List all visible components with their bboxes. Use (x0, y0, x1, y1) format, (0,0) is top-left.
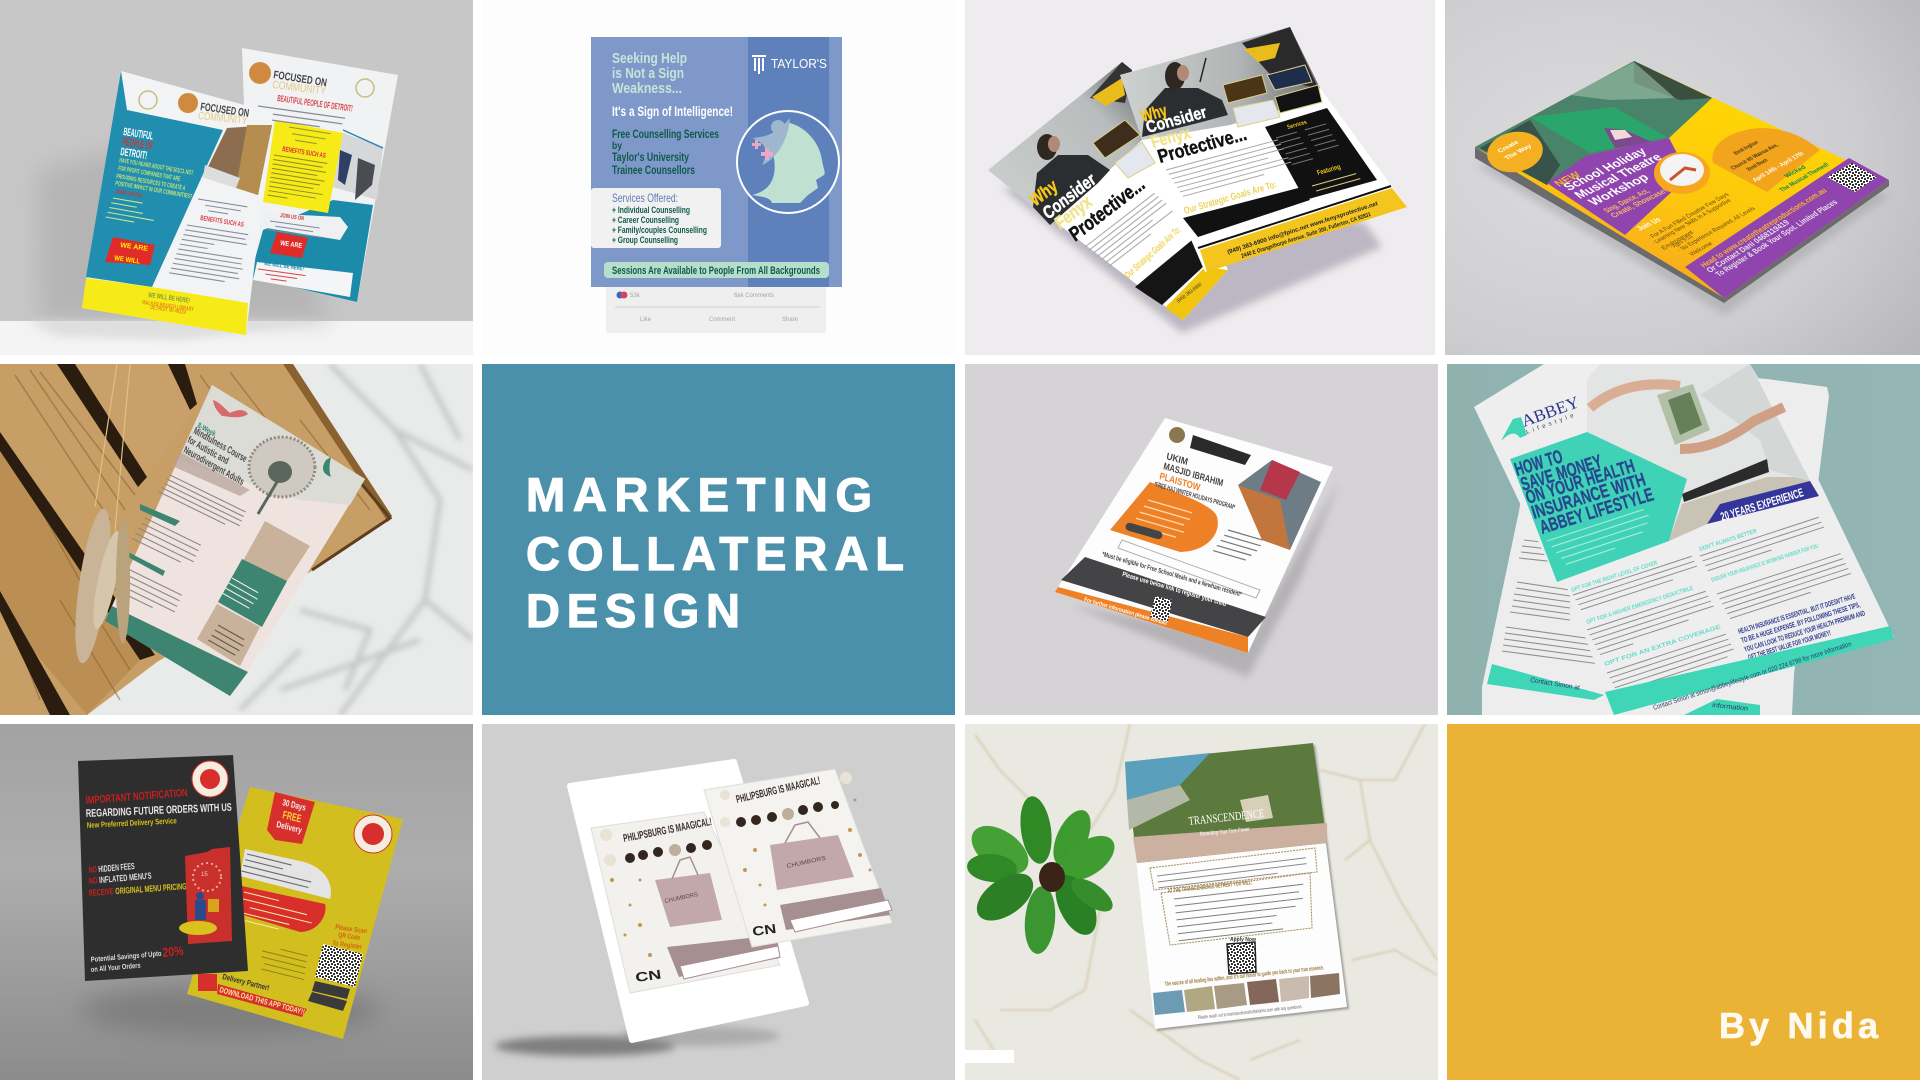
panel: Focused on Community flyers (0, 0, 473, 355)
QR code (315, 944, 363, 987)
flyer (105, 385, 365, 696)
flyer: black flyer: New Preferred Delivery Service (87, 816, 177, 830)
flyer: PLAISTOW (1158, 471, 1201, 494)
flyer: *Must be eligible for Free School Meals and a Newham resident* (1102, 551, 1242, 599)
poster body: Taylor's University (612, 150, 689, 164)
orange venue arch (1712, 128, 1820, 192)
flyer: The source of all healing lies within, and it's our honor to guide you back to your true essence. (1165, 965, 1325, 988)
flyer text: · Ages 5-13 (1668, 234, 1695, 250)
wood crate (0, 364, 392, 715)
footer bar: Contact Simon at simon@abbeylifestyle.com or 020 224 6798 for more information (1652, 641, 1853, 712)
flyer: Please use below link to register your child (1122, 571, 1227, 608)
flyer: back Fenyx flyer: (949) 383-6900 (1176, 282, 1203, 305)
card A: CN (634, 966, 662, 985)
checklist box (1161, 873, 1312, 945)
flyer: back Fenyx flyer: Our Strategic Goals Are To: (1123, 224, 1183, 281)
social card under the poster: Comment (709, 317, 735, 323)
flyer: back community flyer: WE ARE (280, 240, 303, 250)
flyer: front community flyer: PEOPLE OF (122, 136, 154, 153)
flyer: yellow flyer: To Register (332, 940, 363, 951)
badge: 20 years experience: 20 YEARS EXPERIENCE (1719, 485, 1805, 524)
article columns: OPT FOR AN EXTRA COVERAGE (1604, 624, 1722, 668)
poster body (591, 37, 842, 287)
logo: Taylor's (752, 55, 827, 74)
flyer: front Fenyx flyer: Featuring (1316, 164, 1342, 177)
title: COLLATERAL (526, 527, 904, 580)
flyer text: Wicked (1783, 165, 1808, 179)
logo: Taylor's: TAYLOR'S (771, 56, 827, 71)
flyer text: The Musical Themed! (1778, 162, 1831, 193)
panel: UKIM Masjid Ibrahim flyer (965, 364, 1438, 715)
flyer: front Fenyx flyer: Fenyx (1148, 123, 1193, 152)
icon: dandelion (249, 437, 315, 514)
card A: CHUMBORS (664, 892, 699, 905)
headline: INSURANCE WITH (1529, 470, 1648, 524)
flyer: front community flyer: JOIN US ON (115, 189, 142, 200)
flyer: back community flyer: COMMUNITY (272, 79, 327, 98)
badge: Create The Way: The Way (1503, 143, 1534, 161)
flyer: front community flyer: COMMUNITY (198, 110, 248, 127)
flyer: Please reach out to transcendencefortheforms.com with any questions. (1198, 1004, 1303, 1021)
flyer: front community flyer: WE WILL (114, 255, 141, 266)
headline: SAVE MONEY (1518, 451, 1605, 496)
social card under the poster (606, 287, 826, 333)
photo strip (1153, 973, 1340, 1015)
flyer: front Fenyx flyer: Services (1287, 120, 1308, 131)
poster body: by (612, 141, 622, 152)
flyer: front Fenyx flyer: Why (1138, 101, 1170, 126)
QR code (1227, 937, 1256, 974)
headline: ON YOUR HEALTH (1523, 456, 1638, 509)
flyer: black flyer: Potential Savings of Upto (90, 949, 162, 964)
flyer: MASJID IBRAHIM (1162, 461, 1224, 489)
flyer: yellow flyer: Delivery (276, 819, 303, 835)
author credit: By Nida (1719, 1005, 1879, 1046)
flyer: back Fenyx flyer: Why (1026, 175, 1061, 210)
card B: PHILIPSBURG IS MAAGICAL! (735, 775, 821, 806)
panel: By Nida (1447, 724, 1920, 1080)
logo: Abbey Lifestyle: ABBEY (1519, 392, 1582, 431)
flyer: back Fenyx flyer: Protective... (1066, 173, 1149, 246)
flyer: black flyer (78, 755, 248, 981)
flyer: front Fenyx flyer: Consider (1143, 103, 1209, 137)
flyer: for Autistic and (186, 435, 230, 467)
flyer: black flyer: IMPORTANT NOTIFICATION (85, 787, 188, 807)
flyer: black flyer: NO INFLATED MENU'S (88, 871, 152, 886)
flyer: black flyer: 20% (162, 943, 185, 960)
flyer: Mindfulness Course (192, 426, 249, 465)
flyer text: School Holiday (1560, 145, 1650, 193)
back flyer stack (1482, 364, 1829, 715)
flyer text: Bondi Beach (1745, 158, 1770, 172)
logo: Abbey Lifestyle: Lifestyle (1526, 413, 1575, 436)
QR code (1150, 596, 1172, 622)
flyer: back Fenyx flyer (988, 62, 1228, 320)
marble veins (240, 364, 473, 715)
flyer (1125, 743, 1349, 1031)
article columns: OPT FOR THE RIGHT LEVEL OF COVER (1571, 560, 1659, 594)
flyer: front community flyer: FOCUSED ON (200, 101, 250, 120)
poster body: + Family/couples Counselling (612, 225, 707, 236)
flyer text: Workshop (1585, 171, 1652, 208)
badge: 20 years experience (1707, 481, 1819, 524)
social card under the poster: Like (640, 317, 652, 323)
poster body: Services Offered: (612, 191, 678, 205)
flyer body (1475, 61, 1889, 298)
flyer: front community flyer: BENEFITS SUCH AS (200, 215, 244, 229)
poster body: + Career Counselling (612, 215, 679, 226)
flyer: back community flyer: WE WILL BE HERE! (264, 261, 304, 273)
panel: delivery app flyers (0, 724, 473, 1080)
title: DESIGN (526, 584, 740, 637)
photo circle (1654, 152, 1710, 194)
flyer: Neurodivergent Adults (182, 445, 246, 488)
flyer text: NEW (1552, 170, 1584, 189)
card A: PHILIPSBURG IS MAAGICAL! (622, 816, 713, 845)
flyer text: Or Contact Dani 0468119419 (1704, 218, 1791, 274)
flyer: back Fenyx flyer: Fenyx (1051, 191, 1095, 233)
checklist box: AT THE TRANSCENDENCE RETREAT YOU WILL: (1168, 880, 1253, 895)
flyer text: To Register & Book Your Spot. Limited Places (1713, 198, 1840, 278)
teal hexagon (1510, 432, 1687, 582)
flyer: back community flyer: JOIN US ON (280, 213, 304, 222)
title (526, 468, 904, 637)
flyer: front community flyer (82, 71, 273, 335)
back flyer stack: information (1712, 702, 1748, 713)
flyer: black flyer: REGARDING FUTURE ORDERS WITH US (86, 802, 232, 820)
phone and courier: 15 (201, 872, 208, 878)
flyer text: Musical Theatre (1571, 151, 1665, 201)
flyer: front community flyer: HAVE YOU HEARD ABOUT THE 501C3, NOT (119, 157, 194, 177)
flyer image: forest (1475, 61, 1712, 185)
flyer text: Church 60 Wairoa Ave, (1729, 142, 1780, 171)
article columns (1571, 516, 1851, 688)
wheat stalks (75, 364, 130, 664)
flyer: back community flyer: BEAUTIFUL PEOPLE OF DETROIT! (277, 93, 353, 114)
headline: HOW TO (1512, 447, 1565, 481)
flyer: front Fenyx flyer: Our Strategic Goals Are To: (1183, 180, 1278, 217)
flyer: front community flyer: WE ARE (120, 242, 149, 253)
card B (704, 769, 892, 947)
flyer text: April 14th - April 17th (1751, 151, 1806, 183)
panel: title block (482, 364, 955, 715)
QR code: Apply Now (1230, 937, 1256, 943)
back flyer stack: Contact Simon at (1530, 677, 1580, 692)
flyer: yellow flyer (187, 787, 403, 1039)
front flyer (1474, 364, 1894, 715)
flyer: front community flyer: FOR PROFIT COMPANIES THAT ARE (118, 165, 181, 183)
flyer: front community flyer: PROVIDING RESOURCES TO CREATE A (116, 173, 186, 192)
gold marble veins (975, 724, 1437, 1080)
purple title block (1547, 138, 1679, 235)
headline: ABBEY LIFESTYLE (1537, 485, 1656, 539)
panel: Taylor's counselling poster (591, 37, 842, 333)
flyer text: · No Experience Required, All Levels (1676, 206, 1758, 253)
badge: Create The Way (1487, 132, 1543, 172)
purple footer band (1685, 158, 1889, 298)
flyer: yellow flyer: QR Code (338, 932, 361, 942)
flyer text (1552, 140, 1840, 278)
flyer text: Environment (1660, 230, 1695, 251)
flyer: UKIM (1165, 451, 1189, 468)
article columns: OPT FOR A HIGHER EMERGENCY DEDUCTIBLE (1586, 586, 1694, 626)
poster body: It's a Sign of Intelligence! (612, 103, 733, 119)
poster body: Trainee Counsellors (612, 163, 695, 177)
panel: Abbey Lifestyle flyers (1447, 364, 1920, 715)
flyer: black flyer: NO HIDDEN FEES (88, 861, 135, 875)
flyer: front community flyer: POSITIVE IMPACT IN OUR COMMUNITIES? (115, 180, 193, 201)
panel: Fenyx Protective flyers (965, 0, 1435, 355)
icon: head in circle (737, 111, 839, 213)
flyer: yellow flyer: Delivery Partner! (222, 972, 270, 993)
flyer text: Bondi Anglican (1732, 140, 1760, 156)
flyer text: Welcome (1688, 241, 1715, 257)
flyer: *FREE HAJ WINTER HOLIDAYS PROGRAM* (1154, 481, 1236, 511)
flyer: yellow flyer: FREE (281, 809, 302, 826)
card A (591, 812, 780, 993)
flyer: front community flyer: WALKER BRANCH LIBRARY (142, 300, 194, 313)
flyer: yellow flyer: DOWNLOAD THIS APP TODAY!! (218, 985, 306, 1017)
flyer text: Head to www.createtheatreproductions.com.au (1698, 186, 1829, 269)
title: MARKETING (526, 468, 872, 521)
badge: Create The Way: Create (1496, 140, 1521, 154)
flyer: 8-Week (196, 421, 217, 439)
flyer: For further information please contact (1084, 597, 1167, 627)
flyer: front Fenyx flyer: 2440 E Orangethorpe Avenue, Suite 300, Fullerton, CA 92831 (1241, 212, 1372, 260)
phone and courier (179, 847, 232, 944)
flyer: front Fenyx flyer: Protective... (1155, 124, 1249, 168)
social card under the poster: 53k (630, 293, 641, 299)
flyer: black flyer: RECEIVE ORIGINAL MENU PRICING (88, 881, 187, 898)
flyer: front community flyer: DETROIT! (120, 146, 148, 162)
flyer text: · Learning New Skills In A Supportive (1650, 198, 1733, 246)
panel: School Holiday Musical Theatre flyer (1445, 0, 1920, 355)
flyer: back community flyer (242, 48, 398, 302)
hero photo (1125, 743, 1327, 863)
article columns: DON'T ALWAYS BETTER (1699, 528, 1758, 553)
poster body: + Group Counselling (612, 235, 678, 246)
flyer: front community flyer: BEAUTIFUL (123, 126, 154, 143)
poster body: + Individual Counselling (612, 205, 690, 216)
hero photo: Revealing Your True Power (1200, 827, 1250, 838)
panel: Philipsburg cards (482, 724, 955, 1080)
flyer: front community flyer: DETROIT MI 48224 (150, 305, 187, 316)
social card under the poster: Share (782, 317, 799, 323)
headline (1514, 450, 1654, 534)
hero photo: TRANSCENDENCE (1188, 806, 1265, 828)
poster body: Weakness... (612, 80, 682, 97)
flyer: yellow flyer: Please Scan (335, 924, 367, 935)
article columns: ENSURE YOUR INSURANCE IS WORKING HARDER FOR YOU (1711, 544, 1819, 584)
flyer text: Create, Showcase! (1608, 187, 1670, 219)
paper stack edge (1475, 147, 1889, 303)
jar of money (1657, 384, 1710, 445)
poster body: Free Counselling Services (612, 127, 719, 141)
flyer: back community flyer: FOCUSED ON (273, 69, 328, 89)
poster body: is Not a Sign (612, 65, 684, 82)
flyer text: Join Us (1634, 215, 1663, 232)
callout: GET THE BEST VALUE FOR YOUR MONEY! (1747, 628, 1832, 662)
flyer: front Fenyx flyer (1120, 27, 1407, 272)
callout (1737, 592, 1866, 662)
poster body: Seeking Help (612, 50, 687, 67)
card B: CHUMBORS (786, 856, 827, 870)
flyer: front community flyer: WE WILL BE HERE! (148, 292, 190, 305)
flyer: back Fenyx flyer: Consider (1039, 169, 1099, 223)
logo: Abbey Lifestyle (1501, 396, 1577, 441)
flyer: front Fenyx flyer: (949) 383-6900 info@fpinc.net www.fenyxprotective.net (1227, 201, 1379, 256)
flyer text: Sing, Dance, Act, (1601, 187, 1652, 214)
flyer: back community flyer: BENEFITS SUCH AS (282, 146, 326, 160)
white patch (965, 1050, 1014, 1063)
QR code (1827, 163, 1877, 192)
white backing card (570, 762, 806, 1040)
panel: Transcendence flyer on marble (963, 724, 1438, 1080)
flyer: black flyer: on All Your Orders (90, 961, 141, 974)
intro box (1150, 848, 1317, 890)
panel: Mindfulness course flyer on wood and marble (0, 364, 473, 715)
flyer text: · For A Fun Filled Creative Few Days (1646, 192, 1731, 241)
social card under the poster: 6ak Comments (734, 293, 774, 299)
icon: potted plant (963, 794, 1122, 955)
flyer (1055, 418, 1333, 653)
flyer: yellow flyer: 30 Days (282, 797, 307, 813)
poster body: Sessions Are Available to People From All Backgrounds (612, 265, 820, 277)
card B: CN (751, 921, 777, 939)
